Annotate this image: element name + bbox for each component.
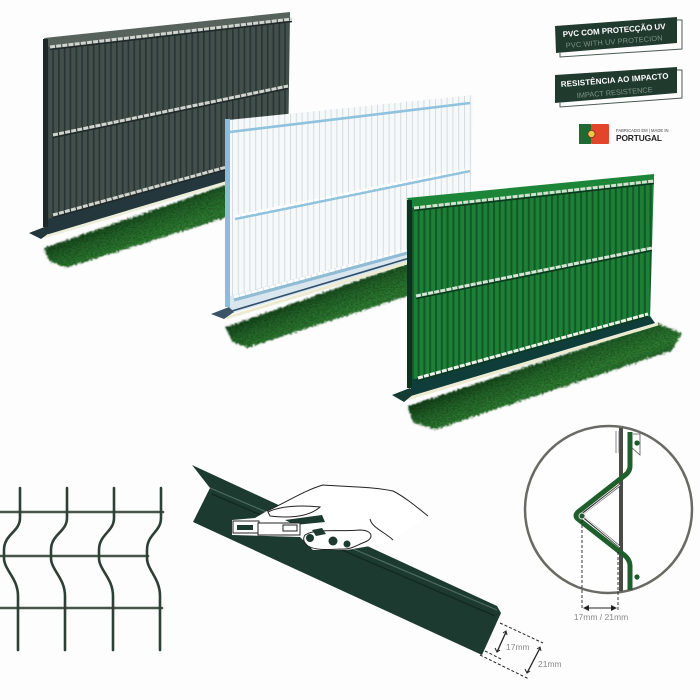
badge: made in Portugal	[579, 124, 669, 144]
grass: white fence	[225, 241, 501, 348]
cutter	[233, 521, 259, 533]
clip details	[631, 434, 640, 455]
badge: impact resistance	[555, 67, 682, 107]
strip	[192, 465, 501, 655]
badge: made in Portugal: PORTUGAL	[616, 133, 662, 143]
badge: impact resistance: IMPACT RESISTENCE	[576, 85, 653, 100]
badge: impact resistance: RESISTÊNCIA AO IMPACTO	[560, 72, 669, 89]
hand holding cutter	[232, 485, 428, 550]
wire	[619, 428, 623, 591]
fence panel: green	[392, 174, 682, 430]
green PVC profile	[576, 432, 630, 590]
icon: Portuguese flag	[579, 124, 609, 144]
badge: PVC with UV protection: PVC COM PROTECÇÃO UV	[562, 22, 666, 39]
grass: green fence	[407, 323, 682, 430]
wire mesh panel	[0, 488, 163, 650]
badge: PVC with UV protection: PVC WITH UV PROTECION	[565, 33, 663, 50]
fence panel: dark grey	[29, 12, 320, 268]
fingers	[304, 530, 371, 550]
badge: made in Portugal: FABRICADO EM | MADE IN	[616, 128, 669, 133]
label: 17mm: 17mm	[506, 642, 530, 652]
circular detail: strip profile	[525, 426, 692, 622]
dimension: 17mm / 21mm	[574, 520, 628, 622]
label: 21mm: 21mm	[538, 659, 562, 669]
badge: PVC with UV protection	[555, 17, 682, 57]
grass: dark grey fence	[43, 163, 320, 268]
dimension lines: 17mm and 21mm	[480, 623, 543, 679]
PVC strip with cutter	[192, 465, 562, 679]
dimension: 17mm / 21mm: 17mm / 21mm	[574, 612, 628, 622]
fence panel: white	[211, 95, 501, 348]
